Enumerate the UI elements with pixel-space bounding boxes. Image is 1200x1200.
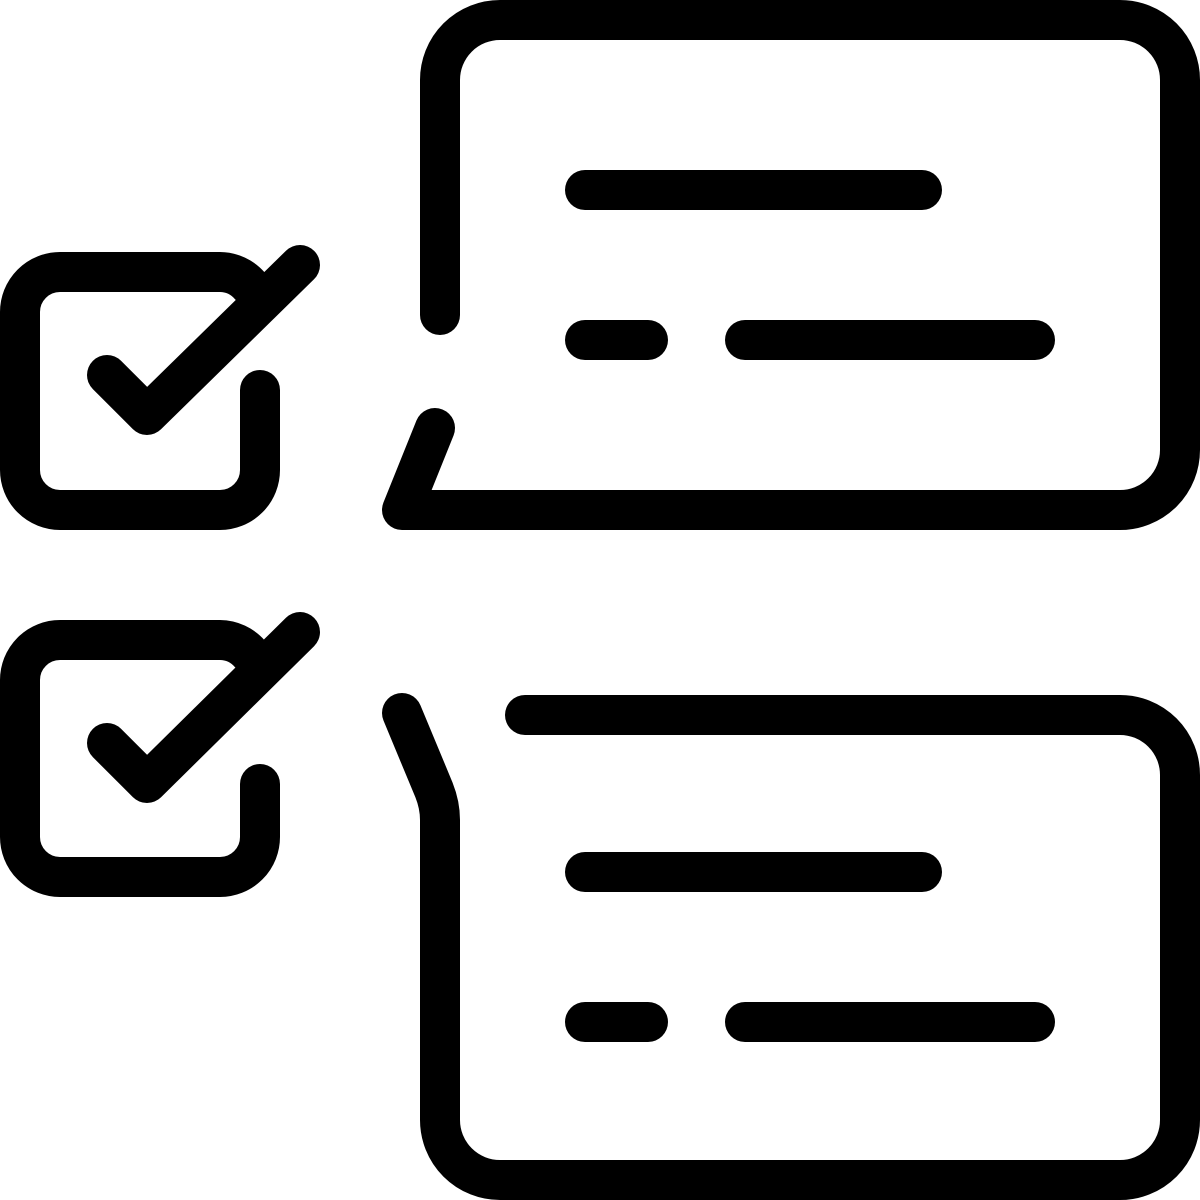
checkbox 1: [20, 265, 300, 510]
checkbox 2: [20, 632, 300, 877]
speech bubble bottom: [402, 713, 1180, 1180]
speech bubble top: [402, 20, 1180, 510]
